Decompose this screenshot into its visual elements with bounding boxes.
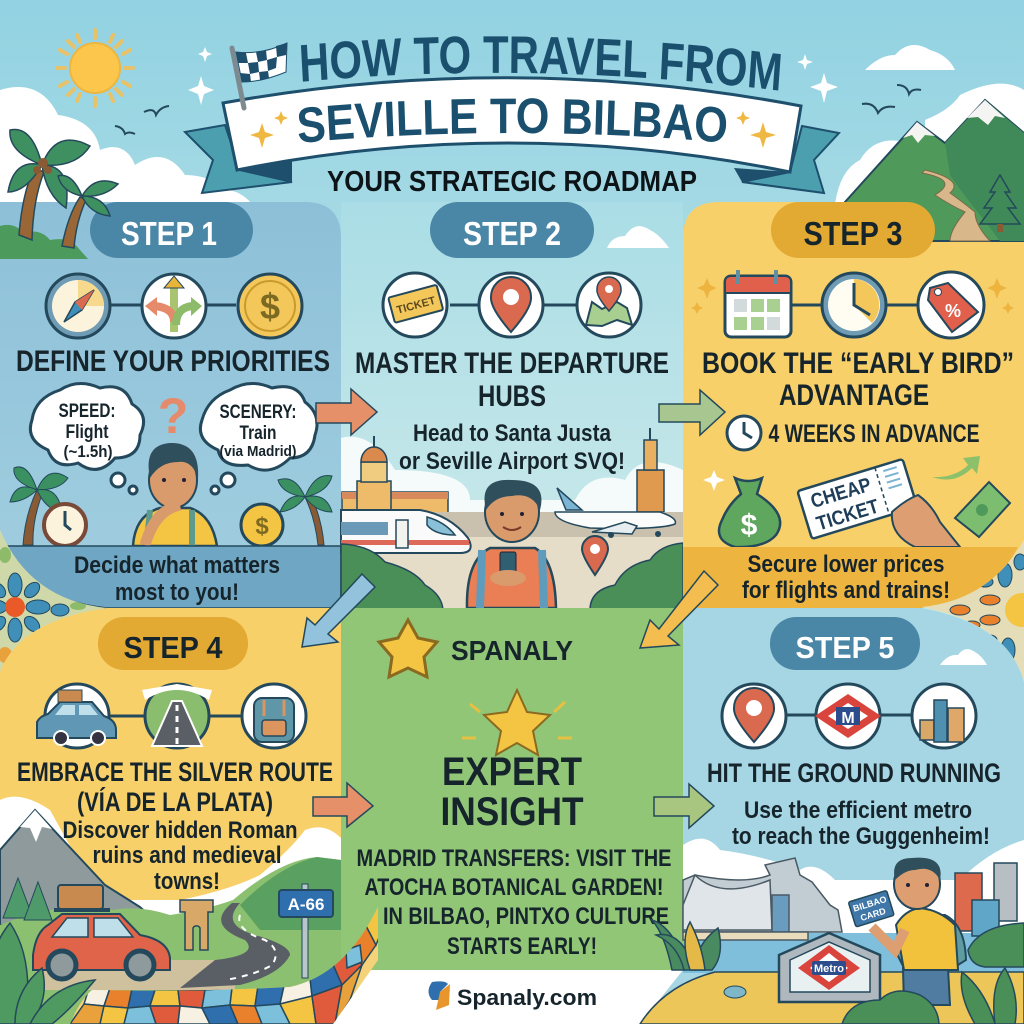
cheap ticket: TICKET (814, 496, 882, 535)
heading: embrace the silver route: EMBRACE THE SILVER ROUTE (17, 757, 333, 787)
arrow: step 3 to center (640, 571, 718, 648)
thought bubble: scenery: SCENERY: (220, 402, 296, 423)
bushes (341, 543, 683, 610)
brand name: SPANALY (451, 635, 573, 666)
heading: master the departure hubs: MASTER THE DEPARTURE (355, 347, 669, 380)
body text: towns! (154, 868, 220, 895)
white clouds (683, 839, 1024, 935)
icon: logo star (379, 620, 437, 677)
step 3 badge (771, 202, 935, 258)
palms, clock, coin (10, 467, 332, 546)
step 5 badge (770, 617, 920, 670)
caption band: for flights and trains! (742, 577, 950, 604)
money bag (719, 478, 780, 547)
caption band (683, 547, 1018, 608)
body text: to reach the Guggenheim! (732, 823, 990, 850)
thought bubble: scenery: (via Madrid) (220, 443, 296, 460)
subtitle: YOUR STRATEGIC ROADMAP (327, 166, 697, 198)
plants (652, 920, 720, 970)
palm trees top left (0, 129, 118, 259)
white clouds behind landmarks (341, 437, 683, 530)
palms, clock, coin: $ (255, 513, 269, 540)
icon: checkered flag (232, 43, 287, 108)
icon: star (462, 690, 572, 755)
mosaic right (920, 535, 1024, 685)
heading: expert insight (440, 750, 584, 834)
person with phone (467, 480, 556, 608)
panel: step 1 (0, 202, 341, 610)
step 2 badge (430, 202, 594, 258)
step 3 icons (691, 270, 1014, 338)
body text (62, 817, 298, 895)
roman arch (180, 900, 213, 950)
step 1 icons: $ (260, 286, 280, 327)
body text: IN BILBAO, PINTXO CULTURE (383, 903, 669, 930)
rock (724, 986, 746, 998)
hand and cash (892, 456, 1010, 547)
cathedral (342, 436, 448, 514)
money bag: $ (741, 509, 758, 542)
birds and sparkles (115, 47, 921, 663)
body text: or Seville Airport SVQ! (399, 448, 625, 475)
step 4 badge: STEP 4 (124, 630, 223, 665)
sparkle (703, 470, 725, 491)
clouds (0, 45, 1024, 204)
person with bilbao card: BILBAO (852, 894, 888, 914)
step 2 icons (383, 273, 641, 337)
body text: ATOCHA BOTANICAL GARDEN! (364, 874, 664, 901)
step 3 badge: STEP 3 (804, 215, 902, 252)
water (683, 933, 1024, 973)
heading: embrace the silver route (17, 757, 333, 817)
metro sign: Metro (814, 963, 844, 975)
ground (341, 512, 683, 610)
thought bubble: scenery: Train (240, 423, 276, 444)
arrow: center to step 5 (654, 784, 714, 828)
body text: MADRID TRANSFERS: VISIT THE (356, 845, 672, 872)
airplane (555, 488, 675, 538)
bell tower (637, 428, 664, 512)
step 2 badge: STEP 2 (463, 215, 561, 252)
arrow: step 4 to center (313, 783, 373, 827)
mosaic path (70, 907, 378, 1024)
car with luggage (33, 885, 170, 979)
heading: book the early bird advantage (702, 347, 1014, 412)
footer (333, 970, 718, 1024)
train (341, 510, 471, 553)
map pin (582, 536, 608, 575)
caption band: most to you! (115, 579, 239, 606)
footer: Spanaly.com (457, 985, 597, 1010)
landscape: clouds, hills and mountain (0, 797, 341, 1024)
step 5 icons (722, 684, 976, 748)
person with bilbao card (848, 858, 966, 1005)
title: SEVILLE TO BILBAO (298, 98, 726, 142)
panel: step 2 (341, 202, 683, 610)
thought bubble: speed: Flight (66, 422, 109, 443)
arrow: step 1 to step 2 (316, 389, 377, 435)
road sign a-66 (279, 884, 333, 978)
question mark: ? (158, 388, 188, 444)
small clouds (357, 227, 407, 242)
heading: expert insight: INSIGHT (440, 790, 584, 834)
cloud (607, 226, 669, 248)
bushes and leaves (842, 923, 1024, 1024)
cheap ticket: CHEAP (808, 474, 874, 513)
thought bubble: speed (30, 383, 144, 494)
sand (640, 972, 1024, 1024)
heading: expert insight: EXPERT (442, 750, 582, 794)
heading: embrace the silver route: (VÍA DE LA PLATA) (77, 786, 273, 817)
body text: Head to Santa Justa (413, 420, 612, 447)
person thinking (133, 443, 217, 546)
guggenheim museum (683, 858, 842, 940)
sparkles (250, 111, 776, 148)
plant leaves (0, 923, 95, 1024)
city buildings (955, 863, 1017, 936)
step 5 icons: M (841, 710, 855, 727)
body text: Use the efficient metro (744, 797, 972, 824)
mosaic left (0, 530, 110, 675)
panel: expert insight (341, 608, 683, 970)
step 2 icons: TICKET (395, 295, 437, 317)
road sign a-66: A-66 (288, 895, 324, 914)
title (298, 36, 781, 142)
panel: step 5 (640, 608, 1024, 1024)
mountains top right (845, 100, 1024, 241)
panel: step 3 (683, 100, 1024, 608)
step 5 badge: STEP 5 (796, 630, 894, 665)
body text (356, 845, 672, 960)
arrow: step 1 to step 4 (302, 574, 375, 647)
icon: sun (57, 30, 133, 106)
caption band (5, 546, 341, 608)
thought bubble: scenery (200, 383, 317, 494)
person with bilbao card: CARD (859, 906, 887, 923)
caption band: Decide what matters (74, 552, 280, 579)
thought bubble: speed: (~1.5h) (64, 442, 112, 461)
body text: Discover hidden Roman (62, 817, 298, 844)
cloud (940, 649, 987, 665)
4 weeks in advance (727, 416, 980, 450)
heading: master the departure hubs: HUBS (478, 380, 546, 413)
step 4 icons (37, 684, 306, 748)
title: HOW TO TRAVEL FROM (300, 36, 781, 90)
arrow: step 2 to step 3 (659, 390, 725, 435)
caption band: Secure lower prices (748, 551, 944, 578)
step 4 badge (98, 617, 248, 670)
cheap ticket (797, 459, 917, 539)
body text (399, 420, 625, 475)
title banner (185, 78, 839, 193)
step 1 icons (46, 274, 302, 338)
metro sign (779, 933, 880, 1002)
body text: STARTS EARLY! (447, 933, 597, 960)
thought bubble: speed: SPEED: (58, 401, 116, 422)
heading: book the early bird advantage: ADVANTAGE (779, 379, 929, 412)
step 1 badge: STEP 1 (121, 215, 217, 252)
body text (732, 797, 990, 850)
heading: master the departure hubs (355, 347, 669, 413)
step 1 badge (90, 202, 253, 258)
body text: ruins and medieval (92, 842, 282, 869)
step 3 icons: % (945, 301, 961, 321)
heading: define your priorities: DEFINE YOUR PRIORITIES (16, 345, 330, 378)
